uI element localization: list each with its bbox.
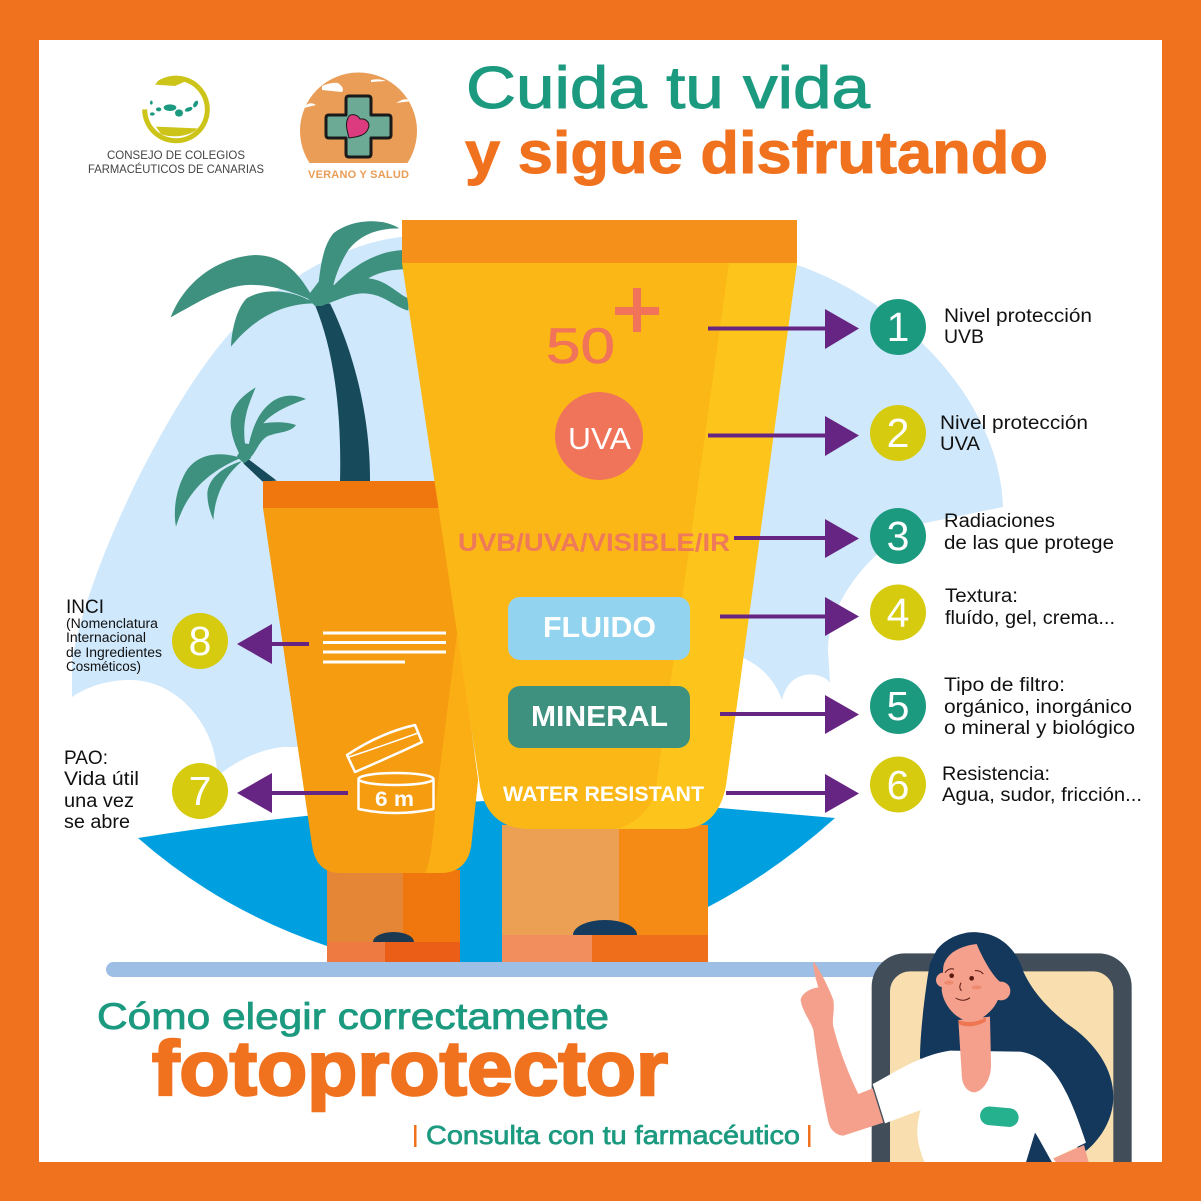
callout 7: una vez xyxy=(64,791,134,812)
logo: Consejo de Colegios xyxy=(88,77,264,176)
arrow 7 xyxy=(237,773,348,813)
callout texts xyxy=(64,306,1142,833)
neck xyxy=(958,1017,991,1092)
UVA badge: UVA xyxy=(568,421,631,456)
callout 2: Nivel protección xyxy=(940,413,1088,434)
logo name: CONSEJO DE COLEGIOS xyxy=(107,148,245,162)
hair xyxy=(920,932,1113,1152)
UVA badge xyxy=(555,392,643,480)
arrow 2 xyxy=(708,416,859,456)
shelf xyxy=(106,962,906,977)
FLUIDO label: FLUIDO xyxy=(543,612,656,644)
badge 4 xyxy=(870,584,926,640)
shirt xyxy=(873,1051,1086,1163)
callout 8: Cosméticos) xyxy=(66,659,141,674)
50+ label: 50 xyxy=(546,318,615,374)
consult line: Consulta con tu farmacéutico xyxy=(426,1120,800,1150)
callout 4: fluído, gel, crema... xyxy=(945,608,1115,629)
callout 5: Tipo de filtro: xyxy=(944,675,1065,696)
icon: open jar 6 m: 6 m xyxy=(375,788,414,811)
number badges xyxy=(172,299,926,819)
icon: ingredient list lines xyxy=(323,633,446,662)
badge 3 xyxy=(870,508,926,564)
callout 3: de las que protege xyxy=(944,533,1114,554)
arrow 8 xyxy=(237,624,309,664)
callout 8: de Ingredientes xyxy=(66,645,162,660)
small tube body xyxy=(263,481,478,873)
icon: ring and islands xyxy=(145,77,207,141)
badge 8 xyxy=(172,613,228,669)
callout 7: PAO: xyxy=(64,748,108,769)
callout 5: orgánico, inorgánico xyxy=(944,697,1132,718)
subtitle: Cómo elegir correctamente xyxy=(97,996,609,1037)
callout 8: (Nomenclatura xyxy=(66,616,158,631)
callout 8 xyxy=(66,597,162,674)
callout 5: o mineral y biológico xyxy=(944,718,1135,739)
callout 5 xyxy=(944,675,1135,739)
big tube body xyxy=(402,220,797,829)
badge 1 xyxy=(870,299,926,355)
window frame xyxy=(872,953,1132,1162)
main heading: fotoprotector xyxy=(152,1026,668,1112)
callout 3: Radiaciones xyxy=(944,511,1055,532)
sun xyxy=(300,72,417,163)
badge 7 xyxy=(172,763,228,819)
title: Cuida tu vida xyxy=(466,55,870,121)
icon: open jar 6 m xyxy=(347,725,434,813)
collar xyxy=(958,1017,986,1026)
radiation label: UVB/UVA/VISIBLE/IR xyxy=(458,529,730,557)
small tube feet xyxy=(327,870,460,962)
badge 5: 5 xyxy=(887,683,909,729)
callout 4 xyxy=(945,586,1115,629)
badge 2: 2 xyxy=(887,410,909,456)
callout 7: Vida útil xyxy=(64,769,139,790)
callout 6 xyxy=(942,764,1142,806)
MINERAL label xyxy=(508,686,690,748)
callout 4: Textura: xyxy=(945,586,1018,607)
icon: cross with heart xyxy=(326,96,391,157)
title xyxy=(465,55,1048,186)
callout 6: Agua, sudor, fricción... xyxy=(942,785,1142,806)
callout 7 xyxy=(64,748,139,833)
callout 8: Internacional xyxy=(66,630,146,645)
FLUIDO label xyxy=(508,597,690,660)
arrow 4 xyxy=(720,597,859,636)
callout 3 xyxy=(944,511,1114,554)
badge 2 xyxy=(870,405,926,461)
badge 6 xyxy=(870,756,926,812)
title: y sigue disfrutando xyxy=(465,120,1048,186)
arrow 6 xyxy=(726,774,859,813)
big tube xyxy=(402,220,797,962)
shirt gap xyxy=(1026,1133,1053,1163)
logo name: FARMACÉUTICOS DE CANARIAS xyxy=(88,161,264,176)
badge 6: 6 xyxy=(887,762,909,808)
arrow 3 xyxy=(734,519,859,558)
arrow 5 xyxy=(720,695,859,734)
logo name xyxy=(88,148,264,176)
badge 1: 1 xyxy=(887,304,909,350)
callout 7: se abre xyxy=(64,812,130,833)
MINERAL label: MINERAL xyxy=(531,701,668,733)
badge 7: 7 xyxy=(189,768,211,814)
sea xyxy=(138,800,835,962)
big tube feet xyxy=(502,825,708,962)
badge 8: 8 xyxy=(189,618,211,664)
logo: Verano y Salud xyxy=(300,72,417,190)
badge 3: 3 xyxy=(887,513,909,559)
50+ label xyxy=(546,288,659,374)
palm trees xyxy=(171,221,408,527)
small tube xyxy=(263,481,478,962)
name badge xyxy=(979,1106,1019,1128)
callout 8: INCI xyxy=(66,597,104,618)
arm pointing up xyxy=(801,962,883,1136)
callout 6: Resistencia: xyxy=(942,764,1050,785)
WATER RESISTANT label: WATER RESISTANT xyxy=(503,783,704,806)
callout 2: UVA xyxy=(940,434,980,455)
arrow 1 xyxy=(708,309,859,349)
logo name: VERANO Y SALUD xyxy=(308,169,409,181)
badge 4: 4 xyxy=(887,590,909,636)
background sky shape xyxy=(72,237,1003,777)
callout 2 xyxy=(940,413,1088,455)
forearm skin xyxy=(1053,1145,1089,1163)
callout 1: Nivel protección xyxy=(944,306,1092,327)
badge 5 xyxy=(870,678,926,734)
arrows xyxy=(237,309,859,813)
pharmacist illustration xyxy=(800,932,1132,1162)
face xyxy=(936,944,1010,1021)
callout 1 xyxy=(944,306,1092,348)
callout 1: UVB xyxy=(944,327,984,348)
